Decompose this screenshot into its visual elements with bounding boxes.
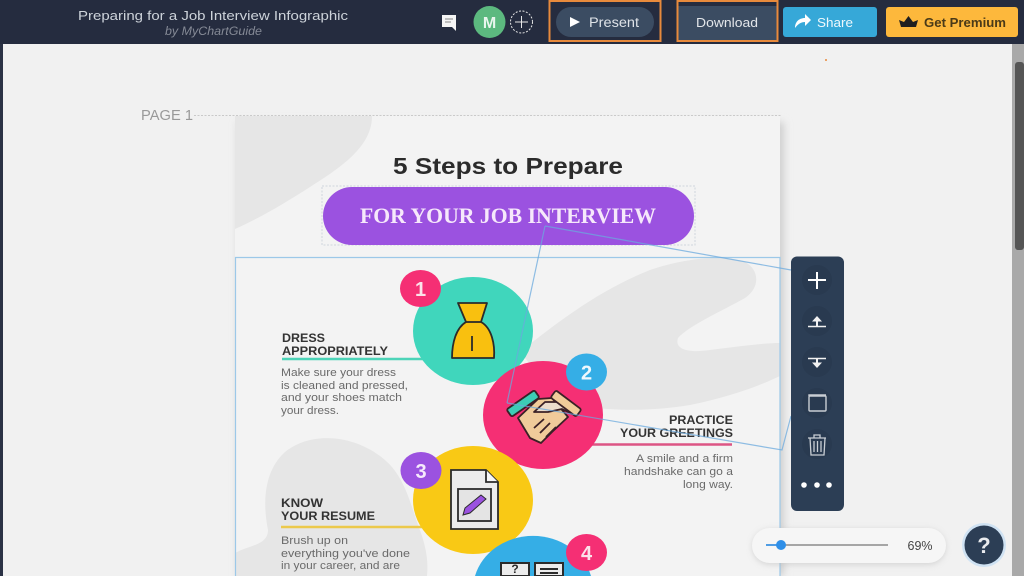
connector line 2 (590, 443, 732, 446)
document author: by MyChartGuide (165, 26, 262, 38)
page label: PAGE 1 (141, 108, 193, 124)
step 1: dress appropriately (281, 270, 533, 417)
heading: 5 Steps to Prepare (393, 153, 623, 179)
yellow circle (413, 446, 533, 554)
icon: handshake (506, 390, 581, 443)
badge 3 (400, 452, 442, 489)
user avatar: M (483, 15, 496, 32)
step 3 text: Brush up on (281, 535, 348, 547)
step 3 text: everything you've done (281, 548, 410, 560)
user avatar (474, 6, 506, 38)
background blob: top left (235, 116, 372, 229)
connector line 3 (281, 526, 425, 528)
step 3 heading: KNOW (281, 498, 323, 510)
present button: Present (589, 15, 639, 30)
left canvas edge (0, 44, 3, 576)
step 2 text: long way. (683, 479, 733, 491)
side toolbar (791, 256, 844, 511)
icon: comment (442, 15, 456, 31)
step 2 text (624, 453, 734, 491)
scrollbar (1012, 44, 1024, 576)
infographic page (235, 116, 784, 576)
icon: move up (808, 316, 826, 326)
icon: move down (808, 358, 826, 368)
share button (783, 7, 877, 37)
zoom control (752, 528, 946, 565)
badge 1: 1 (415, 279, 426, 301)
icon: add collaborator (510, 11, 532, 33)
question mark: ? (511, 562, 519, 576)
share button: Share (817, 15, 853, 30)
icon: question and answer (501, 563, 563, 576)
icon: add (808, 272, 826, 289)
selection frame (236, 258, 780, 576)
subtitle pill (322, 186, 695, 245)
step 1 heading: APPROPRIATELY (282, 346, 388, 358)
step 1 text: Make sure your dress (281, 367, 397, 379)
step 1 heading: DRESS (282, 333, 325, 345)
help button (962, 523, 1006, 567)
download button: Download (696, 15, 758, 30)
icon: trash (808, 435, 826, 455)
step 3 heading (281, 498, 375, 523)
step 3 text (281, 535, 410, 572)
step 2 text: A smile and a firm (636, 453, 733, 465)
badge 1 (400, 270, 441, 307)
teal circle (413, 277, 533, 385)
blue circle (475, 536, 591, 576)
step 3 text: in your career, and are (281, 560, 400, 572)
step 1 text (281, 367, 408, 417)
subtitle pill: FOR YOUR JOB INTERVIEW (360, 203, 656, 228)
step 1 text: is cleaned and pressed, (281, 380, 408, 392)
premium button (886, 7, 1018, 37)
icon: more (801, 482, 832, 488)
zoom control: 69% (908, 538, 933, 553)
document title: Preparing for a Job Interview Infographic (78, 8, 349, 23)
step 4 (475, 534, 607, 576)
step 2 text: handshake can go a (624, 466, 734, 478)
step 3 heading: YOUR RESUME (281, 511, 375, 523)
badge 4: 4 (581, 543, 593, 565)
icon: resume (451, 470, 498, 529)
present button (550, 1, 660, 41)
connector line 1 (282, 358, 425, 360)
step 1 text: your dress. (281, 405, 339, 417)
background blob: right (520, 258, 780, 410)
badge 2: 2 (581, 362, 592, 384)
help button: ? (977, 533, 991, 558)
step 2: practice your greetings (483, 354, 734, 491)
step 3: know your resume (281, 446, 533, 572)
premium button: Get Premium (924, 15, 1006, 30)
top toolbar (0, 0, 1024, 44)
pink circle (483, 361, 603, 469)
background blob: lower left (235, 438, 427, 576)
download button (678, 1, 778, 41)
step 1 heading (282, 333, 388, 358)
step 2 heading: PRACTICE (669, 415, 733, 427)
badge 2 (566, 354, 607, 390)
step 2 heading (620, 415, 733, 440)
icon: duplicate (809, 395, 826, 411)
icon: dress (452, 303, 494, 358)
canvas speck (825, 59, 827, 61)
step 2 heading: YOUR GREETINGS (620, 428, 733, 440)
step 1 text: and your shoes match (281, 392, 402, 404)
badge 3: 3 (415, 461, 427, 483)
selection connector lines (507, 226, 791, 450)
